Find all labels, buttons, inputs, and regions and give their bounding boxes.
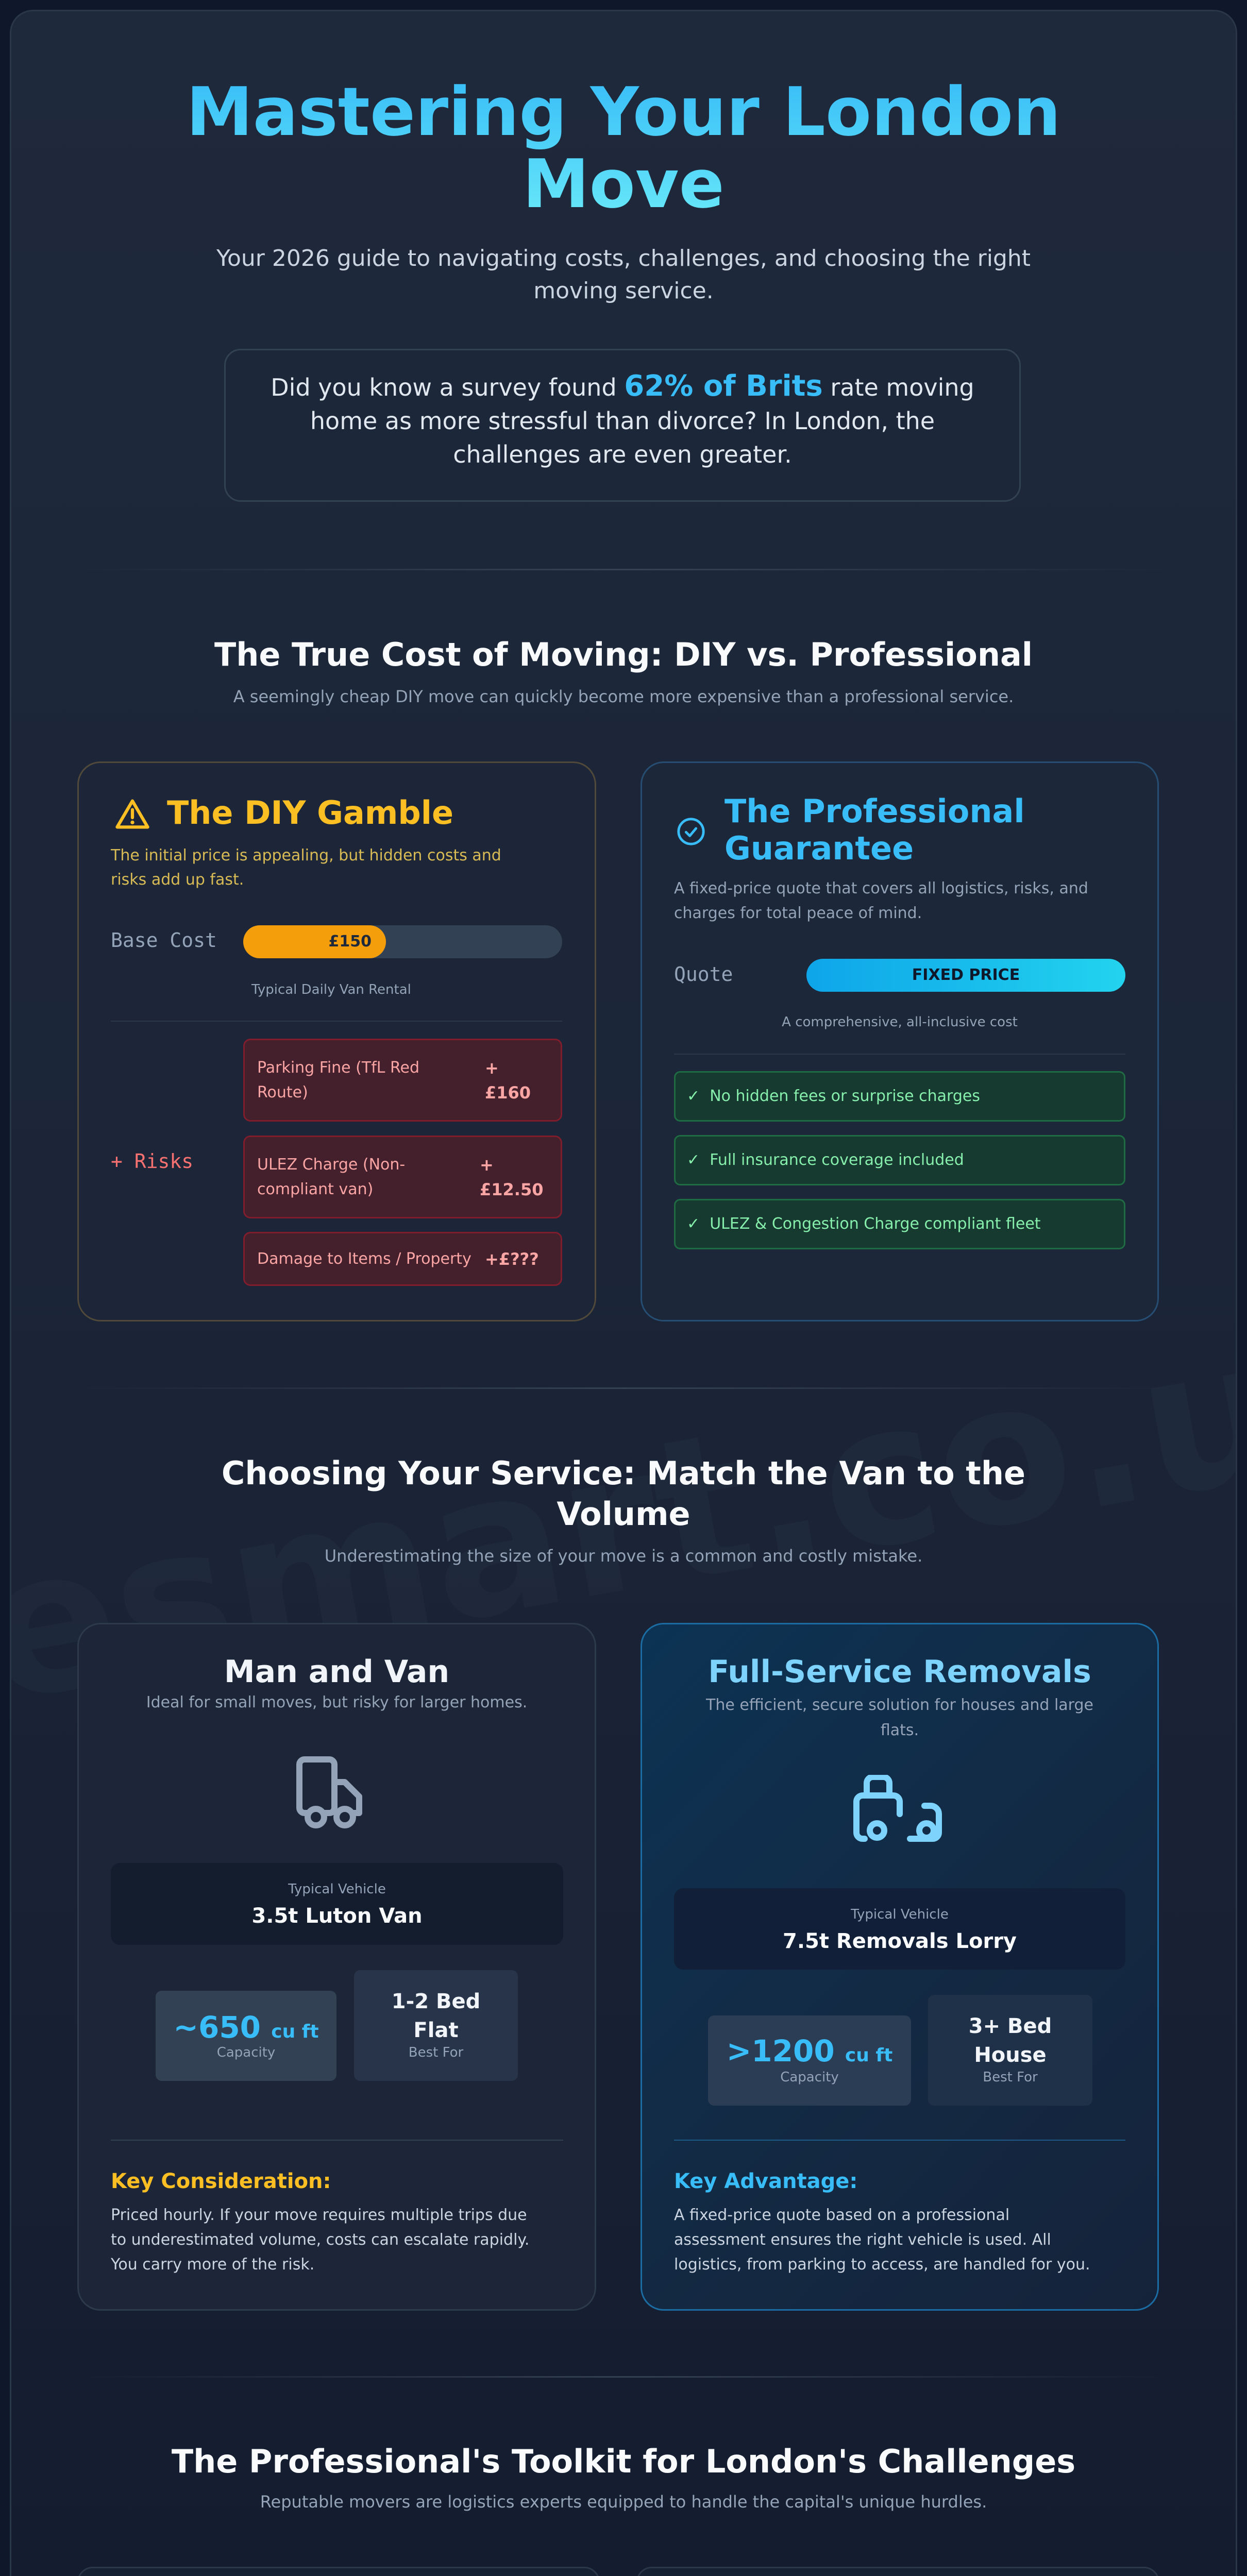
DIY description (110, 846, 501, 889)
stat callout: challenges are even greater. (453, 440, 792, 468)
benefit: insurance (674, 1135, 1125, 1185)
risks label: + Risks (111, 1150, 193, 1173)
vehicle box: Typical Vehicle (851, 1907, 949, 1922)
DIY description: The initial price is appealing, but hidden costs and (111, 846, 501, 865)
fixed price bar: FIXED PRICE (912, 966, 1020, 984)
panel: man and van (77, 1623, 596, 2311)
title: Mastering Your London (186, 73, 1061, 151)
risk: parking fine: Route) (257, 1083, 308, 1101)
consideration text: Priced hourly. If your move requires multiple trips due (111, 2206, 527, 2224)
best for tile: 1-2 Bed (392, 1990, 480, 2013)
best for tile (928, 1995, 1092, 2106)
heading: choosing service: Choosing Your Service: Match the Van to the (222, 1454, 1025, 1492)
DIY title: The DIY Gamble (167, 794, 453, 832)
vehicle box (111, 1863, 563, 1945)
subtitle: Your 2026 guide to navigating costs, challenges, and choosing the right (216, 245, 1031, 272)
title (186, 73, 1061, 223)
risk: ULEZ: + (480, 1155, 494, 1175)
best for tile: 3+ Bed (969, 2014, 1052, 2038)
risk: parking fine: £160 (485, 1083, 531, 1103)
icon: warning (115, 800, 149, 828)
title: Move (523, 145, 724, 223)
subtitle (216, 245, 1031, 304)
best for tile: Flat (413, 2019, 459, 2042)
consideration text (111, 2206, 529, 2274)
pro description (674, 879, 1088, 922)
pro title: The Professional (724, 792, 1025, 830)
card: comprehensive insurance (636, 2567, 1159, 2576)
benefit: ULEZ compliant: ✓ ULEZ & Congestion Charge compliant fleet (687, 1215, 1041, 1233)
benefit: no hidden fees: ✓ No hidden fees or surprise charges (687, 1087, 980, 1105)
heading: choosing service (222, 1454, 1025, 1533)
risk: damage (243, 1232, 562, 1286)
removals subtitle: flats. (881, 1721, 919, 1739)
risk: damage: +£??? (485, 1249, 539, 1269)
best for tile: Best For (983, 2070, 1038, 2085)
panel: professional guarantee (641, 761, 1159, 1321)
vehicle box: 3.5t Luton Van (251, 1904, 423, 1928)
best for tile: Best For (409, 2045, 463, 2060)
stat callout: home as more stressful than divorce? In London, the (310, 407, 935, 435)
benefit: no hidden fees (674, 1071, 1125, 1122)
man and van title: Man and Van (224, 1654, 449, 1690)
icon: lorry (853, 1775, 942, 1842)
removals subtitle (706, 1696, 1093, 1739)
subheading: true cost: A seemingly cheap DIY move can quickly become more expensive than a professional service. (233, 687, 1014, 706)
quote caption: A comprehensive, all-inclusive cost (782, 1014, 1018, 1030)
quote label: Quote (674, 963, 733, 986)
heading: toolkit: The Professional's Toolkit for London's Challenges (172, 2443, 1075, 2480)
benefit: ULEZ compliant (674, 1199, 1125, 1249)
heading: choosing service: Volume (557, 1495, 690, 1533)
risk: ULEZ: £12.50 (480, 1180, 543, 1199)
advantage text: assessment ensures the right vehicle is used. All (674, 2231, 1051, 2249)
advantage text: logistics, from parking to access, are handled for you. (674, 2256, 1090, 2274)
vehicle box: 7.5t Removals Lorry (783, 1929, 1017, 1953)
vehicle box (674, 1888, 1125, 1970)
stat callout (224, 349, 1021, 502)
best for tile (354, 1970, 518, 2081)
card: environmental compliance (77, 2567, 600, 2576)
best for tile: House (974, 2043, 1047, 2067)
capacity tile: ~650 cu ft (173, 2010, 319, 2045)
man and van subtitle: Ideal for small moves, but risky for larger homes. (146, 1693, 527, 1711)
risk: ULEZ (243, 1136, 562, 1218)
fixed price bar (806, 959, 1125, 992)
benefit: insurance: ✓ Full insurance coverage included (687, 1151, 964, 1169)
DIY description: risks add up fast. (111, 871, 244, 889)
risk: parking fine (243, 1039, 562, 1122)
consideration text: You carry more of the risk. (111, 2256, 314, 2274)
pro title: Guarantee (724, 829, 914, 867)
risk: parking fine: + (485, 1058, 499, 1078)
icon: truck (296, 1756, 362, 1828)
consideration text: to underestimated volume, costs can escalate rapidly. (111, 2231, 529, 2249)
risk: ULEZ: compliant van) (257, 1180, 373, 1198)
removals subtitle: The efficient, secure solution for houses and large (706, 1696, 1093, 1714)
removals title: Full-Service Removals (708, 1654, 1091, 1690)
capacity tile (708, 2015, 911, 2106)
key consideration: Key Consideration: (111, 2170, 331, 2193)
panel: full-service removals (641, 1623, 1159, 2311)
advantage text: A fixed-price quote based on a professional (674, 2206, 1009, 2224)
capacity tile: >1200 cu ft (727, 2033, 892, 2069)
key advantage: Key Advantage: (674, 2170, 857, 2193)
capacity tile: Capacity (780, 2070, 839, 2085)
vehicle box: Typical Vehicle (288, 1882, 386, 1897)
pro description: A fixed-price quote that covers all logistics, risks, and (674, 879, 1088, 897)
base cost bar (243, 925, 562, 958)
risk: ULEZ: ULEZ Charge (Non- (257, 1156, 405, 1174)
heading: true cost: The True Cost of Moving: DIY vs. Professional (214, 636, 1033, 673)
capacity tile (156, 1991, 336, 2081)
risk: damage: Damage to Items / Property (257, 1250, 471, 1268)
subheading: choosing service: Underestimating the size of your move is a common and costly mistake. (325, 1546, 922, 1566)
bar caption: Typical Daily Van Rental (251, 982, 411, 997)
pro title (724, 792, 1025, 867)
stat callout: Did you know a survey found 62% of Brits rate moving (271, 369, 974, 403)
advantage text (674, 2206, 1090, 2274)
panel: DIY gamble (77, 761, 596, 1321)
base cost bar: £150 (329, 933, 372, 951)
subheading: toolkit: Reputable movers are logistics experts equipped to handle the capital's unique hurdles. (260, 2492, 987, 2512)
pro description: charges for total peace of mind. (674, 904, 922, 922)
capacity tile: Capacity (217, 2045, 275, 2060)
subtitle: moving service. (533, 278, 714, 304)
base cost label: Base Cost (111, 929, 217, 952)
icon: check circle (677, 818, 705, 845)
risk: parking fine: Parking Fine (TfL Red (257, 1059, 419, 1077)
